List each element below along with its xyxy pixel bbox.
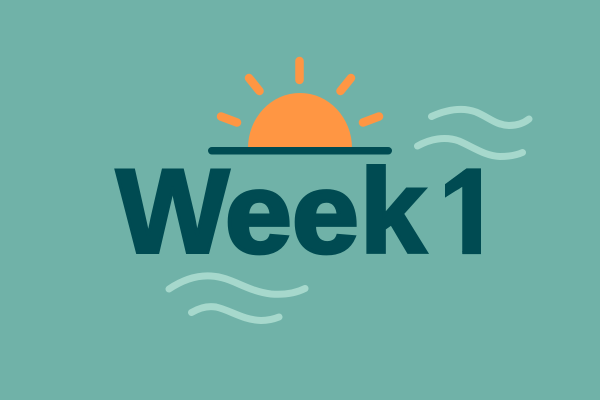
infographic canvas [114, 56, 532, 324]
title: Week 1: e [292, 149, 359, 277]
sun rays [221, 61, 379, 122]
horizon line [208, 147, 392, 154]
sun disc [248, 93, 352, 148]
title: Week 1: 1 [430, 144, 497, 278]
title: Week 1: W [116, 144, 230, 278]
waves: upper right [418, 109, 529, 156]
title: Week 1: k [360, 144, 426, 278]
icon: sunrise [208, 61, 392, 154]
title: Week 1 [114, 164, 481, 256]
title: Week 1: e [225, 149, 292, 277]
waves: lower left [169, 276, 305, 320]
